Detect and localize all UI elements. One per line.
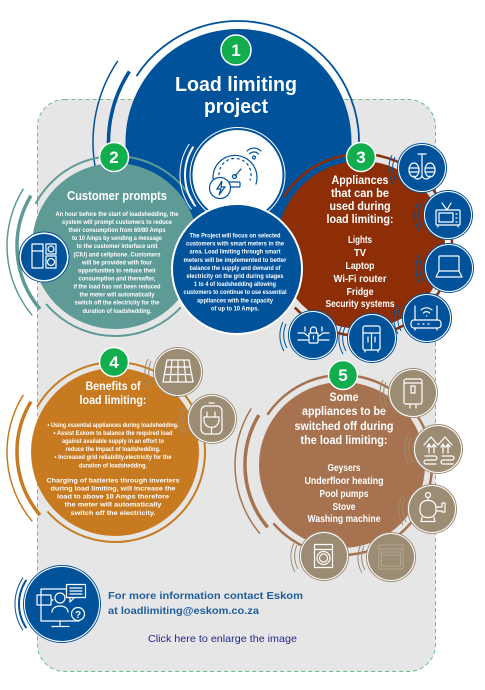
badge 4 <box>100 348 128 376</box>
panel 2: customer prompts: (CIU) and cellphone. Customers <box>74 252 161 258</box>
panel 2: customer prompts: if the load has not been reduced <box>74 284 160 290</box>
icon: lights <box>389 144 446 192</box>
panel: project description: customers to continue to use essential <box>184 289 287 296</box>
panel 3: appliances usable during load limiting: Laptop <box>346 261 374 272</box>
icon: stove <box>358 532 416 582</box>
panel 1: load limiting project <box>70 0 406 310</box>
panel 4: benefits of load limiting: duration of loadshedding. <box>79 462 147 470</box>
panel: project description: 1 to 4 of loadshedding allowing <box>194 281 276 288</box>
panel 1: load limiting project: Load limiting <box>175 74 297 96</box>
panel 3: appliances usable during load limiting <box>236 120 485 370</box>
panel 2: customer prompts: their consumption from 60/80 Amps <box>68 227 166 234</box>
badge 4: 4 <box>109 353 119 372</box>
panel 1: load limiting project: project <box>204 96 268 118</box>
icon: security lock <box>280 310 338 360</box>
panel 2: customer prompts <box>0 94 267 398</box>
panel 2: customer prompts: duration of loadshedding. <box>82 308 152 315</box>
panel 4: benefits of load limiting: Benefits of <box>86 379 141 393</box>
panel 2: customer prompts: opportunities to reduce their <box>78 268 156 274</box>
contact text <box>108 590 303 617</box>
panel 4: benefits of load limiting: Charging of batteries through inverters <box>46 478 180 484</box>
contact text: at loadlimiting@eskom.co.za <box>108 605 259 617</box>
panel: project description: The Project will focus on selected <box>190 232 280 240</box>
icon: contact support <box>0 539 127 669</box>
badge 2: 2 <box>109 148 119 167</box>
panel 2: customer prompts: Customer prompts <box>67 188 167 203</box>
badge 1: 1 <box>231 41 241 60</box>
panel 5: appliances to switch off: Washing machine <box>308 514 381 525</box>
icon: TV <box>415 190 472 240</box>
panel 3: appliances usable during load limiting: Appliances <box>332 173 389 187</box>
panel 4: benefits of load limiting: reduce the impact of loadshedding. <box>66 446 161 453</box>
badge 1 <box>221 35 251 65</box>
panel 4: benefits of load limiting: load limiting: <box>80 393 146 407</box>
panel 5: appliances to switch off: switched off during <box>294 419 394 433</box>
panel 5: appliances to switch off: appliances to be <box>302 404 386 418</box>
background panel <box>38 100 436 672</box>
panel 3: appliances usable during load limiting: TV <box>354 248 366 259</box>
panel 2: customer prompts: the meter will automatically <box>80 292 155 298</box>
icon: plug <box>179 394 236 444</box>
icon: solar panel <box>145 348 202 396</box>
panel 5: appliances to switch off: Stove <box>332 502 356 513</box>
panel 5: appliances to switch off <box>191 314 485 616</box>
panel 3: appliances usable during load limiting: used during <box>330 199 390 213</box>
panel 3: appliances usable during load limiting: Security systems <box>326 299 395 310</box>
panel: project description <box>172 204 302 334</box>
link text: Click here to enlarge the image <box>148 633 297 645</box>
panel 4: benefits of load limiting: load to above 10 Amps therefore <box>57 494 169 500</box>
panel 5: appliances to switch off: Pool pumps <box>320 489 369 500</box>
panel: project description: electricity on the grid during stages <box>186 273 284 280</box>
panel 3: appliances usable during load limiting: that can be <box>331 186 389 200</box>
icon: contact support: ? <box>75 610 81 621</box>
contact text: For more information contact Eskom <box>108 590 303 602</box>
panel: project description: customers with smart meters in the <box>186 240 284 248</box>
panel 4: benefits of load limiting: • Increased grid reliability.electricity for the <box>54 454 172 461</box>
icon: fridge <box>339 314 396 362</box>
panel 3: appliances usable during load limiting: Wi-Fi router <box>334 274 387 285</box>
badge 5: 5 <box>338 366 348 385</box>
panel 4: benefits of load limiting: during load limiting, will increase the <box>50 486 176 492</box>
panel 3: appliances usable during load limiting: Fridge <box>346 287 374 298</box>
panel 5: appliances to switch off: the load limiting: <box>300 433 388 447</box>
panel: project description: balance the supply and demand of <box>190 265 281 272</box>
panel 2: customer prompts: will be provided with four <box>81 260 152 266</box>
icon: underfloor heating <box>405 424 462 474</box>
badge 5 <box>328 360 358 390</box>
panel 4: benefits of load limiting: switch off the electricity. <box>70 510 156 517</box>
icon: pool pump <box>399 484 456 534</box>
panel: project description: area. Load limiting through smart <box>190 249 281 256</box>
panel: project description: of up to 10 Amps. <box>211 306 259 312</box>
icon: wifi router <box>394 294 452 342</box>
panel 2: customer prompts: switch off the electricity for the <box>74 300 160 306</box>
panel 4: benefits of load limiting: against available supply in an effort to <box>62 438 164 445</box>
panel 3: appliances usable during load limiting: Lights <box>348 235 372 246</box>
panel 4: benefits of load limiting <box>0 300 267 604</box>
badge 3 <box>346 142 376 172</box>
badge 3: 3 <box>356 148 366 167</box>
panel 2: customer prompts: system will prompt customers to reduce <box>62 219 172 226</box>
icon: smart meter gauge <box>157 95 317 255</box>
panel: project description: meters will be implemented to better <box>184 257 287 264</box>
panel 3: appliances usable during load limiting: load limiting: <box>326 212 394 226</box>
panel 4: benefits of load limiting: • Assist Eskom to balance the required load <box>54 430 172 437</box>
panel 4: benefits of load limiting: the meter will automatically <box>64 502 162 508</box>
panel 4: benefits of load limiting: • Using essential appliances during loadshedding. <box>48 422 179 429</box>
icon: fridge and washing machine <box>19 232 69 282</box>
panel 2: customer prompts: consumption and thereafter, <box>78 276 156 282</box>
panel 2: customer prompts: An hour before the start of loadshedding, the <box>56 211 179 218</box>
panel 5: appliances to switch off: Some <box>330 390 359 404</box>
icon: geyser <box>380 368 438 418</box>
badge 2 <box>100 142 128 172</box>
panel 2: customer prompts: to 10 Amps by sending a message <box>72 235 162 242</box>
icon: laptop <box>416 244 474 292</box>
panel 5: appliances to switch off: Underfloor heating <box>304 476 384 487</box>
panel: project description: appliances with the capacity <box>197 297 273 304</box>
icon: washing machine <box>291 532 348 580</box>
panel 2: customer prompts: to the customer interface unit <box>76 243 158 250</box>
panel 5: appliances to switch off: Geysers <box>328 463 361 474</box>
